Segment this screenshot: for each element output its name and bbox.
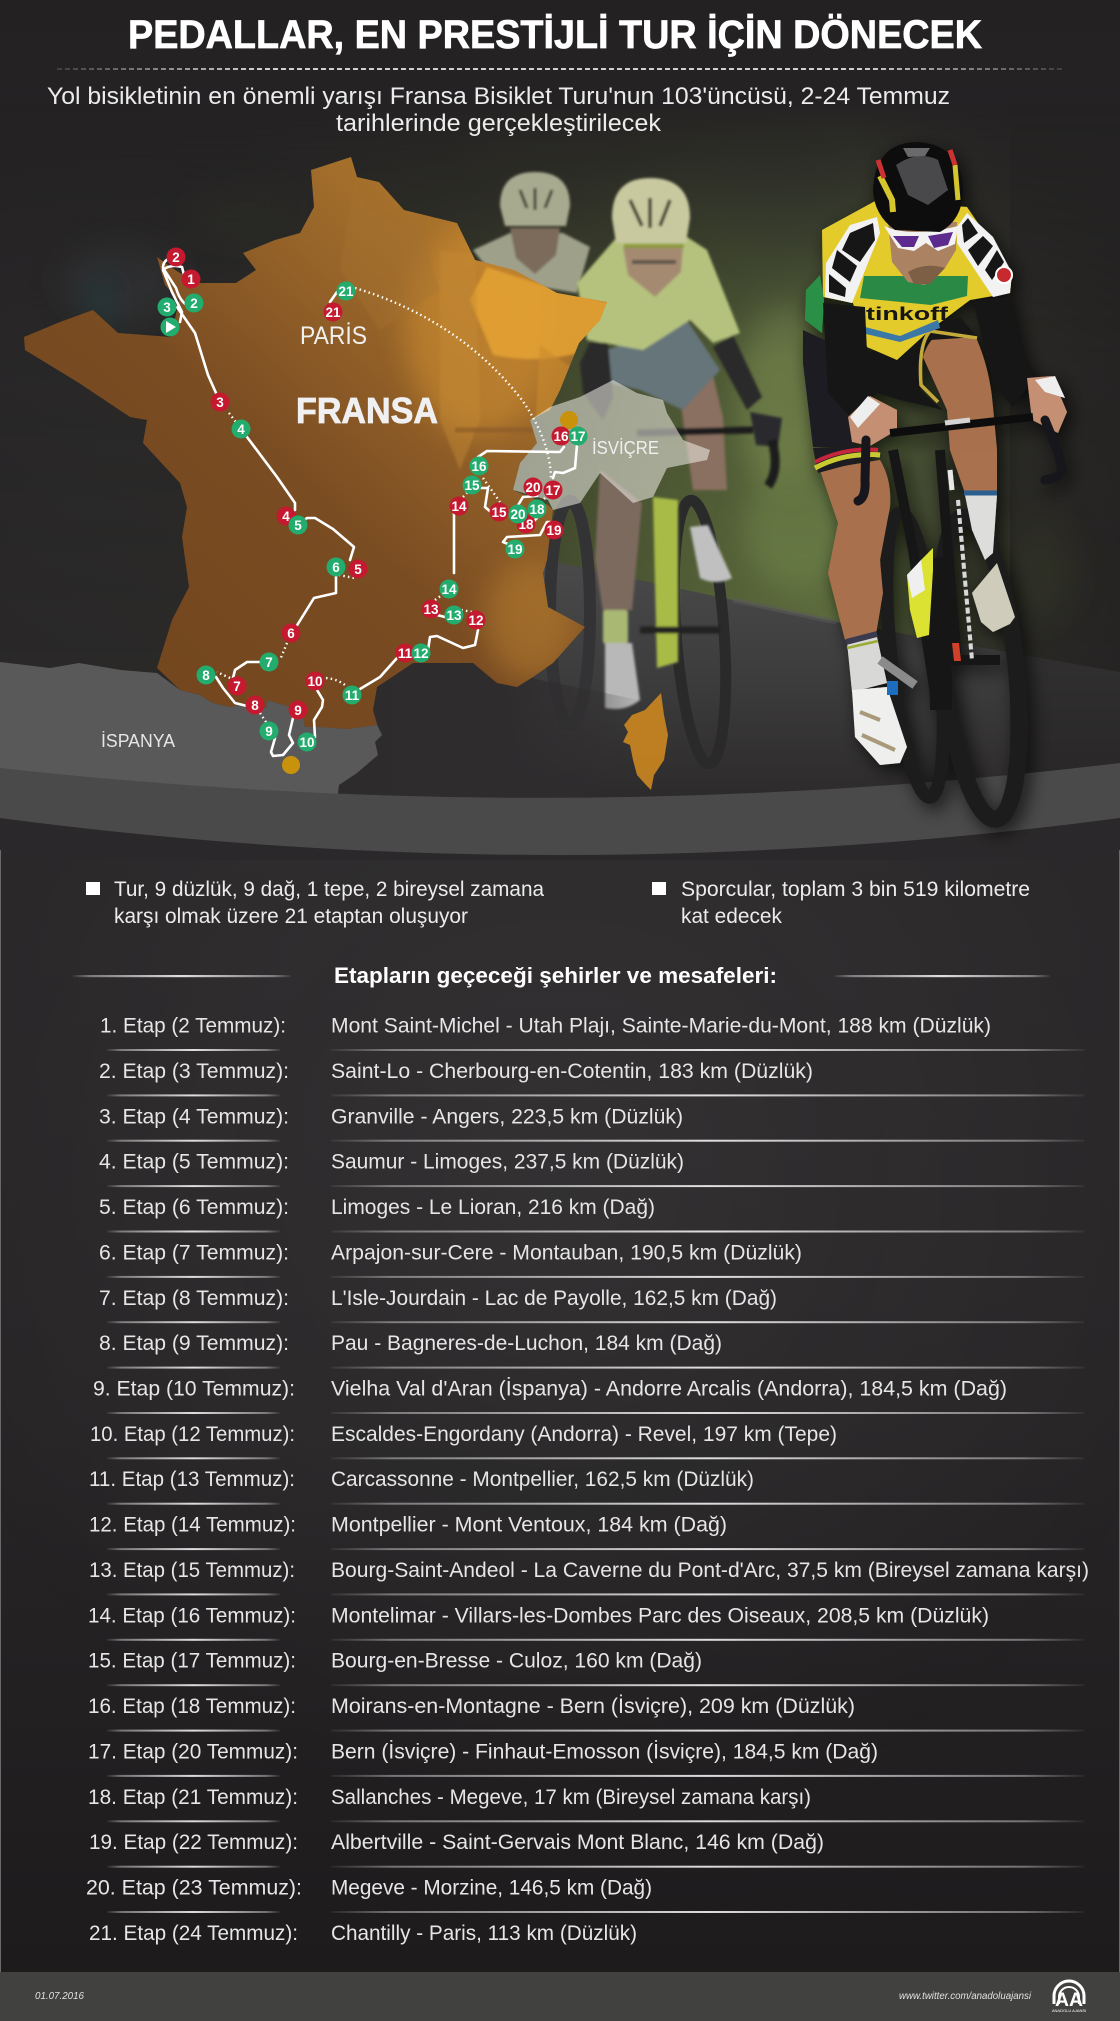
rider in front: front wheel xyxy=(667,499,733,765)
photo background: blurred roadside and road xyxy=(73,139,1120,786)
stage 16: 16. Etap (18 Temmuz): xyxy=(88,1695,296,1718)
rider in front: legs and shoes xyxy=(577,178,782,709)
stage 4: Saumur - Limoges, 237,5 km (Düzlük) xyxy=(331,1151,684,1174)
stage markers: start (green) xyxy=(158,282,588,752)
right hand xyxy=(1027,376,1067,433)
stage markers: start (green): 5 xyxy=(294,518,302,533)
stage markers: start (green): 13 xyxy=(446,608,462,623)
stage 2: Saint-Lo - Cherbourg-en-Cotentin, 183 km (Düzlük) xyxy=(331,1060,813,1083)
stage 15: Bourg-en-Bresse - Culoz, 160 km (Dağ) xyxy=(331,1650,702,1673)
left drop bar xyxy=(858,440,866,501)
bike frame xyxy=(893,450,1000,707)
stage 17: 17. Etap (20 Temmuz): xyxy=(88,1740,298,1763)
stage table xyxy=(86,1014,1089,1945)
tinted cyclist showing through France xyxy=(392,224,607,684)
stage 7: L'Isle-Jourdain - Lac de Payolle, 162,5 km (Dağ) xyxy=(331,1287,777,1310)
map: France xyxy=(24,157,607,729)
stage 3: 3. Etap (4 Temmuz): xyxy=(99,1105,289,1128)
stage 15 xyxy=(88,1650,702,1673)
map: dark sea xyxy=(336,660,640,800)
stage markers: finish (red): 8 xyxy=(251,698,259,713)
stage 10: Escaldes-Engordany (Andorra) - Revel, 197 km (Tepe) xyxy=(331,1423,837,1446)
dark right vignette xyxy=(1010,438,1120,760)
road surface xyxy=(374,562,1120,798)
stage markers: finish (red): 6 xyxy=(287,626,295,641)
stage 13: Bourg-Saint-Andeol - La Caverne du Pont-d'Arc, 37,5 km (Bireysel zamana karşı) xyxy=(331,1559,1089,1582)
map labels xyxy=(101,321,659,751)
far sock xyxy=(965,495,997,560)
stage markers: start (green): 9 xyxy=(265,724,273,739)
stage markers: finish (red): 9 xyxy=(294,703,302,718)
city dots xyxy=(282,411,578,774)
far leg xyxy=(950,450,997,493)
subtitle xyxy=(47,83,950,137)
bottom curved band of the hero xyxy=(0,763,1120,855)
red mark on fork xyxy=(952,643,961,661)
bullet: total distance xyxy=(652,878,1030,928)
stage 7: 7. Etap (8 Temmuz): xyxy=(99,1287,289,1310)
stage markers: finish (red): 4 xyxy=(282,509,290,524)
logo: Anadolu Agency: ANADOLU AJANSI xyxy=(1052,2008,1086,2013)
stage 7 xyxy=(99,1287,777,1310)
footer bar xyxy=(0,1972,1120,2021)
stage markers: start (green): 12 xyxy=(413,646,429,661)
stage markers: start (green): 20 xyxy=(510,507,526,522)
stage markers: start (green): 19 xyxy=(507,542,523,557)
stage 12: 12. Etap (14 Temmuz): xyxy=(89,1514,296,1537)
stage 14: Montelimar - Villars-les-Dombes Parc des Oiseaux, 208,5 km (Düzlük) xyxy=(331,1604,989,1627)
stage markers: start (green): 17 xyxy=(570,429,586,444)
subtitle: tarihlerinde gerçekleştirilecek xyxy=(336,110,662,137)
stage 6 xyxy=(99,1241,802,1264)
near sock xyxy=(847,637,887,692)
jersey xyxy=(822,200,1012,360)
stage markers: finish (red): 5 xyxy=(354,562,362,577)
stage 8: 8. Etap (9 Temmuz): xyxy=(99,1332,289,1355)
panel edge lines xyxy=(0,850,1120,1972)
label: Paris: PARİS xyxy=(300,321,367,350)
stage 17: Bern (İsviçre) - Finhaut-Emosson (İsviçre), 184,5 km (Dağ) xyxy=(331,1740,878,1763)
background cyclists xyxy=(473,172,782,765)
stage 19: Albertville - Saint-Gervais Mont Blanc, 146 km (Dağ) xyxy=(331,1831,824,1854)
stage 21: 21. Etap (24 Temmuz): xyxy=(89,1922,298,1945)
foreground cyclist xyxy=(803,142,1067,823)
bullet: stage count: karşı olmak üzere 21 etaptan oluşuyor xyxy=(114,905,468,928)
stage 14: 14. Etap (16 Temmuz): xyxy=(88,1604,296,1627)
left arm xyxy=(823,303,877,417)
sunglasses xyxy=(884,226,958,251)
rear wheel xyxy=(876,510,954,800)
label: Spain: İSPANYA xyxy=(101,731,175,751)
stage markers: finish (red): 12 xyxy=(468,613,484,628)
stage markers: start (green): 2 xyxy=(190,296,198,311)
stage markers: finish (red): 16 xyxy=(553,429,569,444)
right arm xyxy=(973,297,1035,407)
map: Switzerland xyxy=(513,380,710,510)
stage markers: start (green): 6 xyxy=(332,560,340,575)
stage markers: finish (red): 3 xyxy=(216,395,224,410)
stage 11 xyxy=(89,1468,754,1491)
stage 5 xyxy=(99,1196,655,1219)
stage markers: finish (red) xyxy=(166,248,570,720)
map routes xyxy=(163,257,577,756)
stage 5: 5. Etap (6 Temmuz): xyxy=(99,1196,289,1219)
stage 1: 1. Etap (2 Temmuz): xyxy=(100,1014,286,1038)
bullet: stage count xyxy=(86,878,544,928)
stage 11: 11. Etap (13 Temmuz): xyxy=(89,1468,295,1491)
rider in front: back wheel xyxy=(550,501,590,725)
water bottle and yellow detail xyxy=(907,548,933,638)
helmet xyxy=(873,142,963,232)
near thigh xyxy=(923,333,997,450)
left hand xyxy=(848,396,897,446)
stage markers: finish (red): 14 xyxy=(451,499,467,514)
stage markers: finish (red): 13 xyxy=(423,602,439,617)
stage 12: Montpellier - Mont Ventoux, 184 km (Dağ) xyxy=(331,1514,727,1537)
pedal xyxy=(880,660,915,685)
stage 5: Limoges - Le Lioran, 216 km (Dağ) xyxy=(331,1196,655,1219)
shoulder right xyxy=(957,213,1012,297)
stage 21 xyxy=(89,1922,637,1945)
stage markers: start (green): 18 xyxy=(529,502,545,517)
stage 6: 6. Etap (7 Temmuz): xyxy=(99,1241,289,1264)
stage markers: start (green): 3 xyxy=(163,300,171,315)
centre shorts xyxy=(867,317,977,410)
stage 10 xyxy=(90,1423,837,1446)
jersey green band xyxy=(860,276,968,305)
stage 4: 4. Etap (5 Temmuz): xyxy=(99,1151,289,1174)
near shoe xyxy=(852,687,907,765)
stage 4 xyxy=(99,1151,684,1174)
stage 9: 9. Etap (10 Temmuz): xyxy=(93,1378,295,1400)
date: 01.07.2016 xyxy=(35,1990,84,2002)
bullet: total distance: Sporcular, toplam 3 bin 519 kilometre xyxy=(681,878,1030,901)
stage markers: finish (red): 7 xyxy=(233,679,241,694)
stage 20: 20. Etap (23 Temmuz): xyxy=(86,1876,302,1900)
near leg xyxy=(820,460,890,640)
handlebar xyxy=(890,417,1033,433)
stage 15: 15. Etap (17 Temmuz): xyxy=(88,1650,296,1673)
stage markers: finish (red): 20 xyxy=(525,480,541,495)
stage 10: 10. Etap (12 Temmuz): xyxy=(90,1423,295,1446)
stage 18: Sallanches - Megeve, 17 km (Bireysel zamana karşı) xyxy=(331,1786,811,1809)
stage markers: finish (red): 10 xyxy=(307,674,323,689)
stage 8: Pau - Bagneres-de-Luchon, 184 km (Dağ) xyxy=(331,1332,722,1355)
stage 3 xyxy=(99,1105,683,1128)
stage 18 xyxy=(88,1786,811,1809)
stage markers: start (green): 11 xyxy=(345,688,360,703)
bullet: total distance: kat edecek xyxy=(681,905,782,928)
stage 8 xyxy=(99,1332,722,1355)
stage markers: finish (red): 17 xyxy=(545,483,561,498)
Swiss badge xyxy=(996,267,1012,283)
stage 3: Granville - Angers, 223,5 km (Düzlük) xyxy=(331,1105,683,1128)
bullet: stage count: Tur, 9 düzlük, 9 dağ, 1 tepe, 2 bireysel zamana xyxy=(114,878,544,901)
stage 9: Vielha Val d'Aran (İspanya) - Andorre Arcalis (Andorra), 184,5 km (Dağ) xyxy=(331,1378,1007,1400)
map: Corsica xyxy=(623,693,668,790)
stage markers: start (green): 10 xyxy=(299,735,315,750)
stage markers: start (green): 14 xyxy=(441,582,457,597)
label: France: FRANSA xyxy=(296,390,438,431)
stage 13: 13. Etap (15 Temmuz): xyxy=(89,1559,295,1582)
shoulder left xyxy=(825,217,880,303)
stage 2 xyxy=(99,1060,813,1083)
stage markers: start (green): 4 xyxy=(237,422,245,437)
face xyxy=(888,222,957,285)
stage 21: Chantilly - Paris, 113 km (Düzlük) xyxy=(331,1922,637,1945)
subtitle: Yol bisikletinin en önemli yarışı Fransa Bisiklet Turu'nun 103'üncüsü, 2-24 Temmuz xyxy=(47,83,950,110)
stage markers: finish (red): 18 xyxy=(518,517,534,532)
stage 20: Megeve - Morzine, 146,5 km (Dağ) xyxy=(331,1876,652,1900)
right drop bar xyxy=(1045,420,1062,480)
stage 20 xyxy=(86,1876,652,1900)
stage 6: Arpajon-sur-Cere - Montauban, 190,5 km (Düzlük) xyxy=(331,1241,802,1264)
stage 18: 18. Etap (21 Temmuz): xyxy=(88,1786,298,1809)
separator lines xyxy=(107,1049,1084,1913)
stage 19: 19. Etap (22 Temmuz): xyxy=(89,1831,298,1854)
logo: Anadolu Agency xyxy=(1052,1981,1086,2013)
far shoe xyxy=(972,563,1015,632)
list heading: Etapların geçeceği şehirler ve mesafeleri: xyxy=(334,963,777,988)
map: Spain xyxy=(0,662,382,810)
stage 1: Mont Saint-Michel - Utah Plajı, Sainte-Marie-du-Mont, 188 km (Düzlük) xyxy=(331,1014,991,1038)
stage markers: start (green): 7 xyxy=(265,655,273,670)
stage markers: finish (red): 2 xyxy=(172,250,180,265)
stage 16: Moirans-en-Montagne - Bern (İsviçre), 209 km (Düzlük) xyxy=(331,1695,855,1718)
twitter url: www.twitter.com/anadoluajansi xyxy=(899,1990,1032,2002)
near shorts xyxy=(803,330,857,447)
stage 12 xyxy=(89,1514,727,1537)
logo: Anadolu Agency: AA xyxy=(1055,1990,1083,2011)
stage 2: 2. Etap (3 Temmuz): xyxy=(99,1060,289,1083)
stage 11: Carcassonne - Montpellier, 162,5 km (Düzlük) xyxy=(331,1468,754,1491)
stage markers: finish (red): 21 xyxy=(325,305,341,320)
stage markers: start (green): 8 xyxy=(202,668,210,683)
stage markers: finish (red): 19 xyxy=(546,523,562,538)
jersey blue stripe xyxy=(865,320,940,342)
stage markers: start (green): 21 xyxy=(338,284,354,299)
stage markers: finish (red): 1 xyxy=(187,272,195,287)
label: Switzerland: İSVİÇRE xyxy=(592,438,659,458)
front wheel xyxy=(928,513,1032,823)
stage 19 xyxy=(89,1831,824,1854)
stage 16 xyxy=(88,1695,855,1718)
stage markers: start (green): 16 xyxy=(471,459,487,474)
title: PEDALLAR, EN PRESTİJLİ TUR İÇİN DÖNECEK xyxy=(128,12,982,57)
stage markers: start (green): 15 xyxy=(464,478,480,493)
stage markers: finish (red): 11 xyxy=(398,646,413,661)
stage 17 xyxy=(88,1740,878,1763)
rider behind xyxy=(473,172,590,293)
jersey green side panel xyxy=(805,275,824,333)
stage markers: finish (red): 15 xyxy=(491,505,507,520)
jersey sponsor text: tinkoff xyxy=(866,304,950,324)
road kerb xyxy=(733,600,837,622)
board glow xyxy=(0,860,1120,1972)
